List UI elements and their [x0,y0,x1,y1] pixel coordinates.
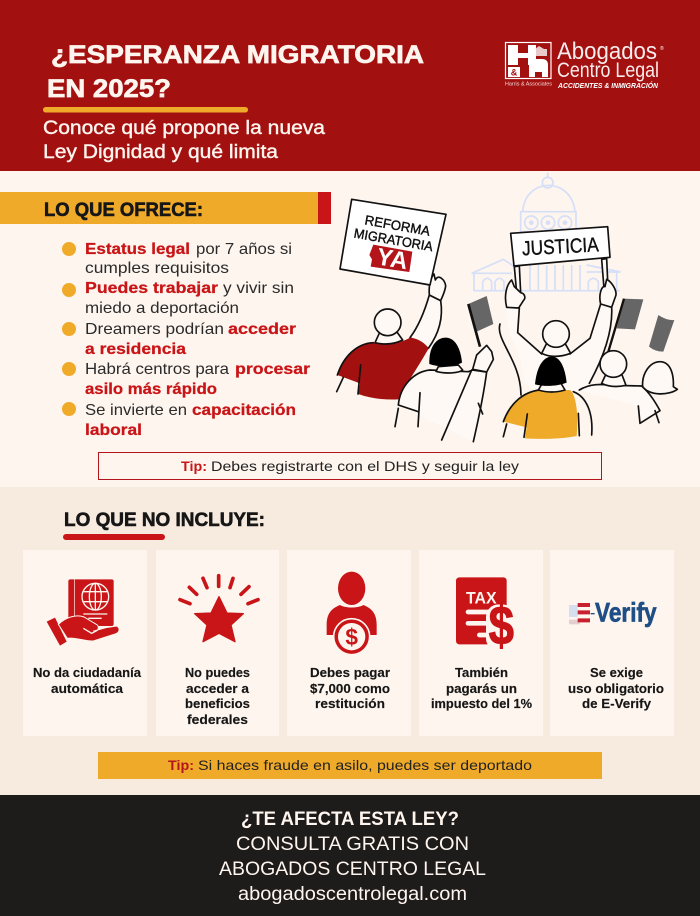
logo: Abogados Centro Legal: ACCIDENTES & INMIGRACIÓN [557,81,659,90]
person at right rear [579,351,677,423]
heading: lo que no incluye: LO QUE NO INCLUYE: [64,510,265,531]
logo: Abogados Centro Legal [505,38,664,90]
card: e-verify [550,550,674,736]
header banner [0,0,700,171]
bullet item: puedes trabajar: y vivir sin [223,280,294,297]
bullet item: centros de asilo: asilo más rápido [85,381,217,398]
person with justice sign [499,227,616,395]
person with justice sign: JUSTICIA [521,234,600,260]
bullet item: capacitación: capacitación [192,402,296,419]
logo: Abogados Centro Legal: & [511,68,518,78]
card text: restitución [315,697,385,711]
illustration: protest crowd [337,173,677,442]
footer call to action: abogadoscentrolegal.com [238,884,467,905]
bullet item: estatus legal: Estatus legal [85,241,190,258]
bullet item: capacitación: Se invierte en [85,402,187,419]
icon: tax document: TAX [466,588,497,607]
title: EN 2025? [47,75,171,103]
tip box: registro DHS [98,452,602,480]
subtitle [43,118,325,163]
benefits list [62,241,310,439]
card text: de E-Verify [582,697,651,711]
bullet item: centros de asilo: procesar [235,361,310,378]
card: beneficios [156,550,279,736]
bullet item: dreamers: a residencia [85,341,186,358]
bullet item: centros de asilo: Habrá centros para [85,361,229,378]
bullet item: estatus legal [62,241,292,277]
footer call to action: CONSULTA GRATIS CON [236,834,469,855]
bullet item: estatus legal: por 7 años si [196,241,292,258]
card text [568,666,664,711]
icon: tax document: $ [489,594,514,656]
icon: star with rays [180,576,258,642]
heading: lo que no incluye [63,510,265,540]
title [47,41,424,103]
card text: uso obligatorio [568,682,664,696]
subtitle: Conoce qué propone la nueva [43,118,325,139]
logo: Abogados Centro Legal: Harris & Associates [505,82,552,88]
card text: pagarás un [446,682,517,696]
capitol building [472,173,621,291]
bullet item: capacitación [62,402,296,439]
sign: reforma migratoria ya: YA [375,243,410,275]
icon: person with dollar coin [327,572,377,655]
card text: $7,000 como [310,682,390,696]
heading bar: lo que ofrece: LO QUE OFRECE: [44,200,203,221]
bullet item: puedes trabajar [62,280,294,317]
card: ciudadanía [23,550,147,736]
heading bar: lo que ofrece [0,192,331,224]
bullet item: estatus legal: cumples requisitos [85,260,229,277]
card: impuesto [419,550,543,736]
logo: Abogados Centro Legal: Abogados [557,38,657,65]
bullet item: dreamers: acceder [228,321,296,338]
footer call to action: ABOGADOS CENTRO LEGAL [219,859,486,880]
icon: person with dollar coin: $ [345,624,358,650]
icon: tax document [456,577,515,656]
flags [468,296,674,352]
bullet item: puedes trabajar: miedo a deportación [85,300,239,317]
card text: federales [187,713,248,727]
section: lo que no incluye [0,487,700,795]
tip box: fraude en asilo: Si haces fraude en asilo, puedes ser deportado [198,757,532,773]
sign: reforma migratoria ya [340,199,446,285]
icon: e-verify logo: Verify [595,598,657,628]
bullet item: centros de asilo [62,361,310,398]
tip box: fraude en asilo [98,752,602,779]
footer call to action [0,795,700,916]
card text [185,666,250,727]
card text: beneficios [185,697,250,711]
card text: automática [51,682,124,696]
icon: e-verify logo [569,598,657,628]
card text: También [455,666,508,680]
card text [33,666,142,696]
title: ¿ESPERANZA MIGRATORIA [51,41,424,69]
bullet item: dreamers: Dreamers podrían [85,321,224,338]
tip box: registro DHS: Tip: [181,458,207,474]
bullet item: capacitación: laboral [85,422,142,439]
card: restitución [287,550,411,736]
person with red shirt and sign [337,274,446,399]
card text [431,666,532,711]
tip box: fraude en asilo: Tip: [168,757,194,773]
person with yellow shirt [503,357,592,439]
tip box: registro DHS: Debes registrarte con el DHS y seguir la ley [211,458,519,474]
person with black hair and raised fist [395,338,493,442]
card text: acceder a [186,682,250,696]
footer call to action: ¿TE AFECTA ESTA LEY? [241,809,459,830]
card text: Se exige [590,666,643,680]
card text: Debes pagar [310,666,390,680]
card text: No puedes [185,666,250,680]
card text: impuesto del 1% [431,697,532,711]
card text [310,666,390,711]
card text: No da ciudadanía [33,666,142,680]
subtitle: Ley Dignidad y qué limita [43,142,278,163]
sign: reforma migratoria ya: REFORMA [364,212,431,239]
title underline [43,107,248,112]
bullet item: dreamers [62,321,296,358]
logo: Abogados Centro Legal: Centro Legal [557,59,659,82]
bullet item: puedes trabajar: Puedes trabajar [85,280,218,297]
sign: reforma migratoria ya: MIGRATORIA [353,226,434,254]
logo: Abogados Centro Legal: ® [660,45,664,52]
icon: passport in hand [47,579,119,646]
